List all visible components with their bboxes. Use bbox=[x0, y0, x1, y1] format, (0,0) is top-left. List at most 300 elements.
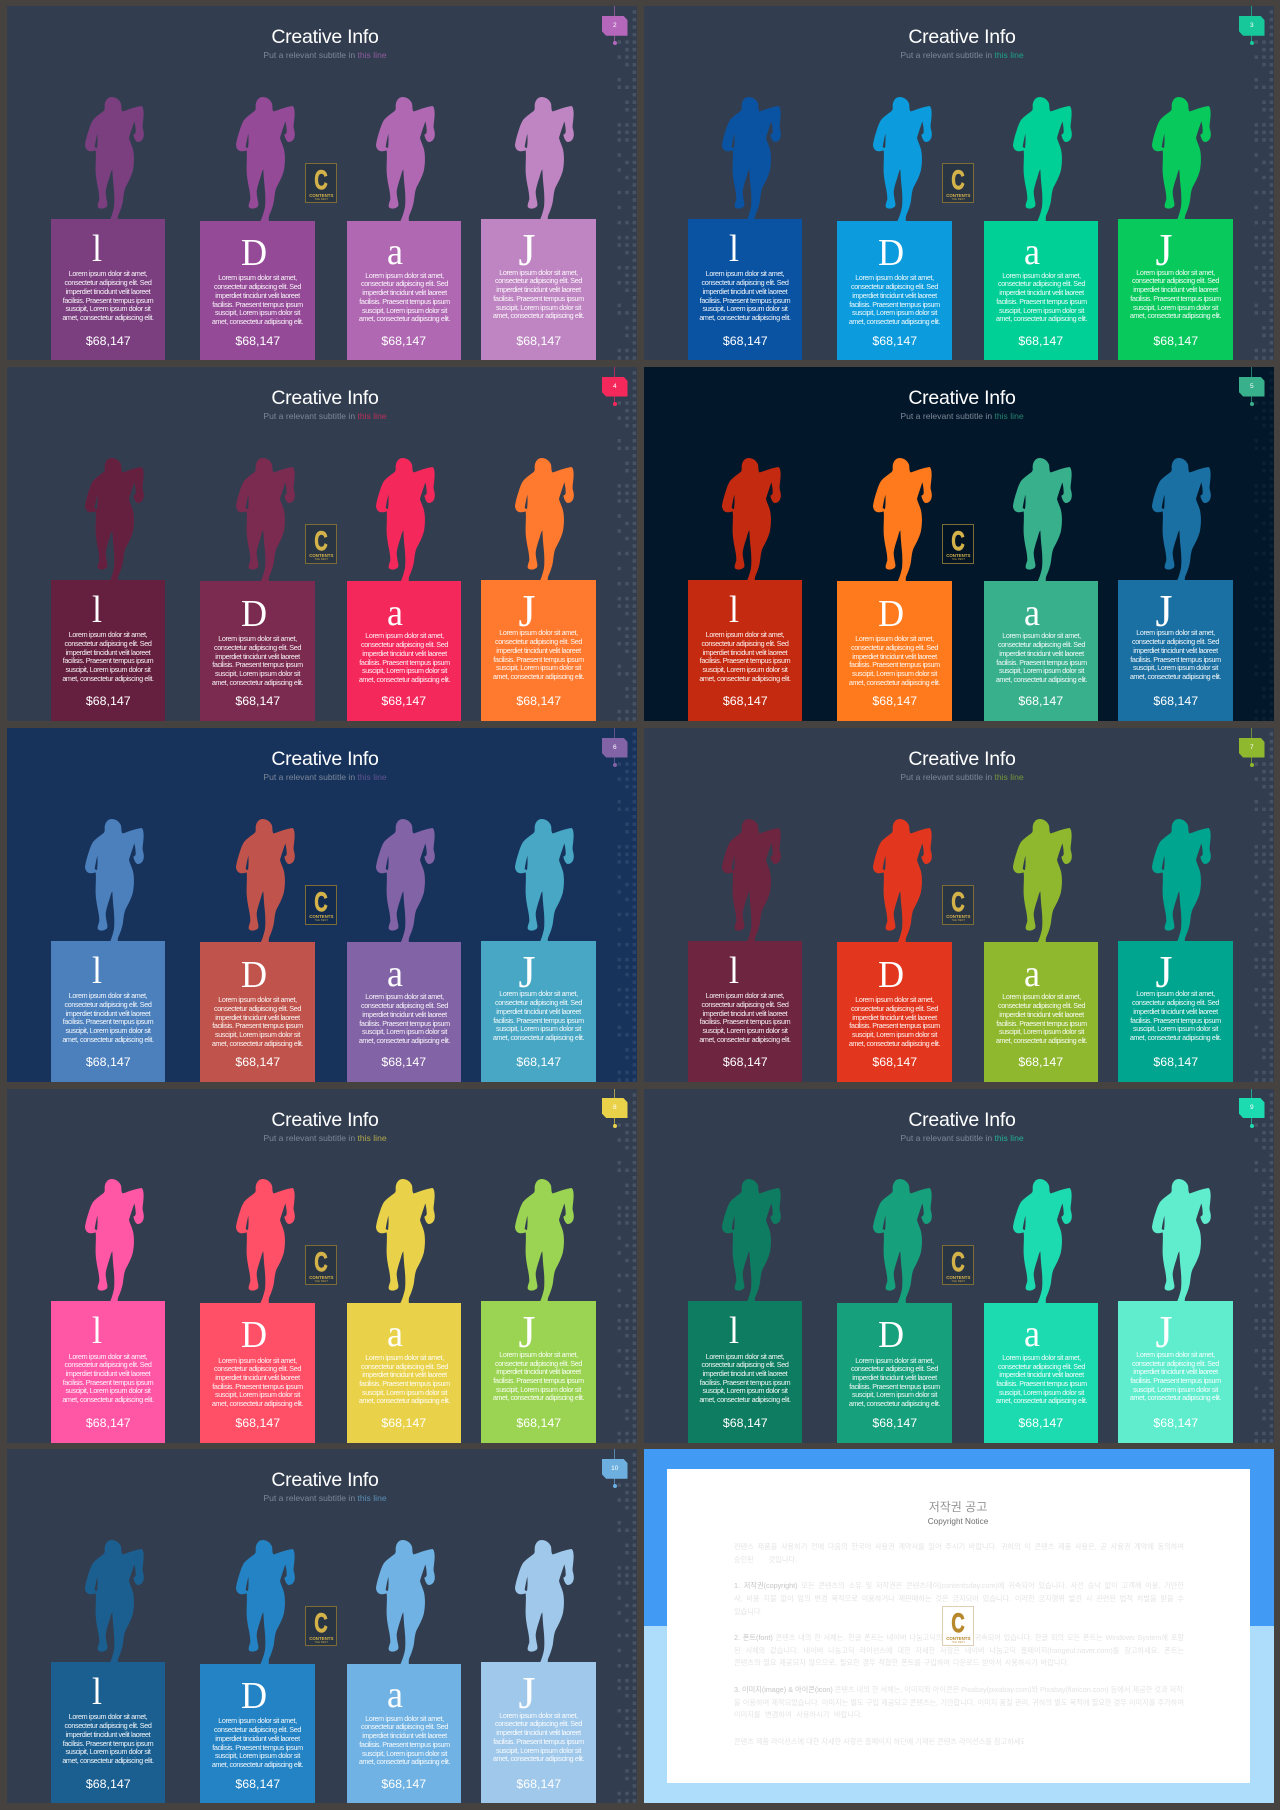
column 1: amet, consectetur adipiscing elit. bbox=[62, 674, 154, 683]
column 3: suscipit, Lorem ipsum dolor sit bbox=[999, 1388, 1084, 1397]
logo bbox=[305, 1245, 337, 1285]
column 4: facilisis. Praesent tempus ipsum bbox=[1130, 1376, 1221, 1385]
column 2: imperdiet tincidunt velit laoreet bbox=[852, 652, 937, 661]
logo: C bbox=[952, 1247, 965, 1277]
title: Creative Info bbox=[908, 387, 1016, 409]
column 3: consectetur adipiscing elit. Sed bbox=[361, 1362, 448, 1371]
logo: CONTENTS bbox=[946, 553, 970, 558]
column 1: imperdiet tincidunt velit laoreet bbox=[66, 1009, 150, 1018]
column 4: consectetur adipiscing elit. Sed bbox=[495, 998, 582, 1007]
column 3: consectetur adipiscing elit. Sed bbox=[998, 1001, 1085, 1010]
title: Creative Info bbox=[908, 748, 1016, 770]
column 3: a bbox=[387, 1313, 403, 1355]
column 3: suscipit, Lorem ipsum dolor sit bbox=[999, 666, 1084, 675]
column 1: amet, consectetur adipiscing elit. bbox=[62, 1756, 154, 1765]
logo bbox=[942, 524, 974, 564]
column 2: Lorem ipsum dolor sit amet, bbox=[218, 995, 297, 1004]
column 1: l bbox=[729, 228, 739, 270]
logo: THE BEST bbox=[314, 1640, 328, 1644]
subtitle: Put a relevant subtitle in this line bbox=[900, 1132, 1024, 1142]
column 3: Lorem ipsum dolor sit amet, bbox=[365, 1353, 444, 1362]
column 2: $68,147 bbox=[872, 334, 917, 348]
column 2 bbox=[200, 97, 315, 360]
column 4: suscipit, Lorem ipsum dolor sit bbox=[1133, 1024, 1218, 1033]
column 2: imperdiet tincidunt velit laoreet bbox=[215, 1013, 300, 1022]
column 2 bbox=[200, 458, 315, 721]
column 1: consectetur adipiscing elit. Sed bbox=[702, 278, 788, 287]
column 1: Lorem ipsum dolor sit amet, bbox=[706, 269, 784, 278]
column 3: a bbox=[1024, 1313, 1040, 1355]
column 2: imperdiet tincidunt velit laoreet bbox=[852, 291, 937, 300]
column 3: Lorem ipsum dolor sit amet, bbox=[1002, 631, 1081, 640]
column 3: imperdiet tincidunt velit laoreet bbox=[999, 288, 1084, 297]
subtitle: Put a relevant subtitle in this line bbox=[263, 772, 387, 782]
logo bbox=[942, 1245, 974, 1285]
column 1: amet, consectetur adipiscing elit. bbox=[62, 1395, 154, 1404]
column 4: consectetur adipiscing elit. Sed bbox=[495, 637, 582, 646]
subtitle: Put a relevant subtitle in this line bbox=[900, 50, 1024, 60]
column 2: $68,147 bbox=[235, 1055, 280, 1069]
title: Creative Info bbox=[271, 26, 379, 48]
column 4: imperdiet tincidunt velit laoreet bbox=[496, 646, 581, 655]
column 3: $68,147 bbox=[1018, 1416, 1063, 1430]
column 4: amet, consectetur adipiscing elit. bbox=[1130, 1393, 1221, 1402]
column 1: $68,147 bbox=[86, 1776, 131, 1790]
column 4: J bbox=[1155, 946, 1172, 997]
title: Creative Info bbox=[271, 387, 379, 409]
column 1: consectetur adipiscing elit. Sed bbox=[65, 1000, 151, 1009]
column 3: amet, consectetur adipiscing elit. bbox=[359, 1396, 450, 1405]
subtitle: Put a relevant subtitle in this line bbox=[263, 411, 387, 421]
column 1: facilisis. Praesent tempus ipsum bbox=[63, 656, 153, 665]
column 1: $68,147 bbox=[723, 1055, 768, 1069]
column 2 bbox=[837, 819, 952, 1082]
notice body: 이미지를 변경하여 사용하시기 바랍니다. bbox=[734, 1710, 862, 1719]
column 2 bbox=[200, 1179, 315, 1443]
column 2: Lorem ipsum dolor sit amet, bbox=[218, 634, 297, 643]
column 4: consectetur adipiscing elit. Sed bbox=[495, 1359, 582, 1368]
logo: C bbox=[315, 526, 328, 556]
column 1: Lorem ipsum dolor sit amet, bbox=[706, 1352, 784, 1361]
panel: slide 4 crimson orange bbox=[7, 367, 637, 721]
column 3: Lorem ipsum dolor sit amet, bbox=[365, 992, 444, 1001]
column 2: suscipit, Lorem ipsum dolor sit bbox=[852, 1030, 937, 1039]
column 2: Lorem ipsum dolor sit amet, bbox=[218, 1356, 297, 1365]
column 4: J bbox=[1155, 1306, 1172, 1357]
column 4: Lorem ipsum dolor sit amet, bbox=[1136, 1350, 1215, 1359]
column 4: suscipit, Lorem ipsum dolor sit bbox=[496, 302, 581, 312]
column 4: amet, consectetur adipiscing elit. bbox=[1130, 1033, 1221, 1042]
logo: CONTENTS bbox=[946, 192, 970, 198]
logo: CONTENTS bbox=[946, 1275, 970, 1280]
column 1: amet, consectetur adipiscing elit. bbox=[699, 1395, 791, 1404]
column 1 bbox=[688, 1179, 802, 1443]
column 4: amet, consectetur adipiscing elit. bbox=[1130, 311, 1221, 320]
logo: THE BEST bbox=[951, 196, 965, 200]
column 2: D bbox=[241, 232, 267, 274]
column 4: facilisis. Praesent tempus ipsum bbox=[493, 1737, 584, 1746]
column 1: suscipit, Lorem ipsum dolor sit bbox=[66, 1747, 150, 1756]
column 2: amet, consectetur adipiscing elit. bbox=[212, 1399, 303, 1408]
column 2: facilisis. Praesent tempus ipsum bbox=[212, 660, 303, 669]
column 2: imperdiet tincidunt velit laoreet bbox=[215, 1373, 300, 1382]
column 3: amet, consectetur adipiscing elit. bbox=[996, 1036, 1087, 1045]
column 2: Lorem ipsum dolor sit amet, bbox=[218, 273, 297, 282]
column 1: Lorem ipsum dolor sit amet, bbox=[69, 269, 147, 278]
column 1: Lorem ipsum dolor sit amet, bbox=[69, 991, 147, 1000]
logo bbox=[305, 524, 337, 564]
column 2: facilisis. Praesent tempus ipsum bbox=[212, 300, 303, 308]
column 4: facilisis. Praesent tempus ipsum bbox=[493, 655, 584, 664]
column 1: consectetur adipiscing elit. Sed bbox=[65, 1360, 151, 1369]
logo: C bbox=[315, 165, 328, 195]
column 2: amet, consectetur adipiscing elit. bbox=[212, 678, 303, 687]
column 3: suscipit, Lorem ipsum dolor sit bbox=[362, 666, 447, 675]
logo: THE BEST bbox=[314, 918, 328, 922]
title: Creative Info bbox=[908, 1108, 1016, 1130]
column 4 bbox=[1118, 1179, 1233, 1443]
column 4: J bbox=[518, 946, 535, 997]
column 3: a bbox=[387, 953, 403, 995]
page tag: 3 bbox=[1250, 22, 1254, 29]
panel: slide 2 purple bbox=[7, 6, 637, 360]
column 4: $68,147 bbox=[516, 1055, 561, 1069]
panel: slide 8 pink yellow bbox=[7, 1088, 637, 1442]
column 2: facilisis. Praesent tempus ipsum bbox=[849, 660, 940, 669]
subtitle: Put a relevant subtitle in this line bbox=[263, 50, 387, 60]
logo: CONTENTS bbox=[309, 553, 333, 558]
column 3: amet, consectetur adipiscing elit. bbox=[359, 1036, 450, 1045]
column 3: a bbox=[1024, 592, 1040, 634]
logo: CONTENTS bbox=[309, 1636, 333, 1640]
column 1: facilisis. Praesent tempus ipsum bbox=[700, 656, 790, 665]
column 2: Lorem ipsum dolor sit amet, bbox=[855, 995, 934, 1004]
column 3: facilisis. Praesent tempus ipsum bbox=[359, 658, 450, 667]
column 3: Lorem ipsum dolor sit amet, bbox=[365, 271, 444, 280]
column 3 bbox=[347, 458, 461, 721]
page tag: 5 bbox=[1250, 382, 1254, 390]
column 4: J bbox=[518, 585, 535, 636]
column 1: l bbox=[92, 1310, 102, 1352]
column 4: consectetur adipiscing elit. Sed bbox=[1132, 276, 1219, 285]
column 2 bbox=[837, 458, 952, 721]
column 2 bbox=[837, 1179, 952, 1443]
logo: THE BEST bbox=[951, 918, 965, 922]
column 4: $68,147 bbox=[1153, 1416, 1198, 1430]
column 4: facilisis. Praesent tempus ipsum bbox=[1130, 655, 1221, 664]
column 4: Lorem ipsum dolor sit amet, bbox=[499, 628, 578, 637]
column 2: consectetur adipiscing elit. Sed bbox=[214, 1004, 301, 1013]
column 4: suscipit, Lorem ipsum dolor sit bbox=[496, 1385, 581, 1394]
column 1: $68,147 bbox=[723, 1416, 768, 1430]
column 4: imperdiet tincidunt velit laoreet bbox=[1133, 1007, 1218, 1016]
column 1: $68,147 bbox=[86, 334, 131, 348]
column 4: $68,147 bbox=[1153, 1055, 1198, 1069]
column 1 bbox=[688, 97, 802, 360]
notice body: 된 서체와 같습니다. 네이버 나눔고딕 라이선스에 대한 자세한 사항은 네이버 나눔고딕 홈페이지(hangeul.naver.com)를 참고하세요. 폰트는 bbox=[734, 1646, 1184, 1655]
notice body: 콘텐츠 제품 라이선스에 대한 자세한 사항은 홈페이지 하단에 기재된 콘텐츠 라이선스를 참고하세요. bbox=[734, 1737, 1024, 1746]
column 3 bbox=[984, 1179, 1098, 1443]
column 4: imperdiet tincidunt velit laoreet bbox=[496, 1367, 581, 1376]
column 4: $68,147 bbox=[516, 694, 561, 708]
column 2: Lorem ipsum dolor sit amet, bbox=[855, 273, 934, 282]
column 2: suscipit, Lorem ipsum dolor sit bbox=[852, 669, 937, 678]
column 1: imperdiet tincidunt velit laoreet bbox=[66, 287, 150, 296]
column 3: amet, consectetur adipiscing elit. bbox=[359, 1757, 450, 1766]
column 2: facilisis. Praesent tempus ipsum bbox=[849, 300, 940, 308]
column 1: $68,147 bbox=[86, 1416, 131, 1430]
notice body: 을 이용하여 제작되었습니다. 이미지는 별도 구입 제공되고 콘텐츠는, 기만합니다. 이미지 품질 관리, 귀하의 별도 목적에 필요한 경우 이미지를 추가하여 bbox=[734, 1698, 1184, 1707]
column 4: Lorem ipsum dolor sit amet, bbox=[499, 1711, 578, 1720]
white sheet bbox=[666, 1469, 1250, 1783]
column 4: amet, consectetur adipiscing elit. bbox=[493, 1393, 584, 1402]
title: Creative Info bbox=[271, 1108, 379, 1130]
column 3: $68,147 bbox=[1018, 334, 1063, 348]
column 4: consectetur adipiscing elit. Sed bbox=[1132, 998, 1219, 1007]
logo bbox=[942, 163, 974, 203]
column 4: Lorem ipsum dolor sit amet, bbox=[1136, 989, 1215, 998]
column 1: suscipit, Lorem ipsum dolor sit bbox=[66, 304, 150, 313]
column 4: amet, consectetur adipiscing elit. bbox=[493, 672, 584, 681]
column 2: imperdiet tincidunt velit laoreet bbox=[215, 291, 300, 300]
column 3: amet, consectetur adipiscing elit. bbox=[359, 314, 450, 323]
column 4: suscipit, Lorem ipsum dolor sit bbox=[1133, 1385, 1218, 1394]
panel: slide 10 blues bbox=[7, 1449, 637, 1803]
logo: CONTENTS bbox=[309, 914, 333, 919]
column 1: amet, consectetur adipiscing elit. bbox=[699, 1035, 791, 1044]
column 1: imperdiet tincidunt velit laoreet bbox=[66, 648, 150, 657]
logo: C bbox=[315, 1608, 328, 1638]
column 4 bbox=[481, 1540, 596, 1803]
column 2: consectetur adipiscing elit. Sed bbox=[214, 1725, 301, 1734]
column 1: consectetur adipiscing elit. Sed bbox=[702, 1360, 788, 1369]
column 3 bbox=[984, 97, 1098, 360]
column 2: suscipit, Lorem ipsum dolor sit bbox=[215, 1030, 300, 1039]
column 2: D bbox=[241, 1675, 267, 1717]
column 3 bbox=[347, 97, 461, 360]
column 1: consectetur adipiscing elit. Sed bbox=[65, 1721, 151, 1730]
column 4: J bbox=[518, 1667, 535, 1718]
column 3: Lorem ipsum dolor sit amet, bbox=[1002, 271, 1081, 280]
column 3: suscipit, Lorem ipsum dolor sit bbox=[999, 1027, 1084, 1036]
column 4 bbox=[481, 1179, 596, 1443]
column 2 bbox=[837, 97, 952, 360]
column 4: Lorem ipsum dolor sit amet, bbox=[499, 989, 578, 998]
column 1 bbox=[688, 458, 802, 721]
column 1: Lorem ipsum dolor sit amet, bbox=[69, 1352, 147, 1361]
column 1: amet, consectetur adipiscing elit. bbox=[699, 674, 791, 683]
column 4: consectetur adipiscing elit. Sed bbox=[1132, 637, 1219, 646]
panel: slide 9 teal bbox=[644, 1088, 1274, 1442]
column 1: consectetur adipiscing elit. Sed bbox=[65, 639, 151, 648]
column 1: l bbox=[729, 1310, 739, 1352]
column 4: Lorem ipsum dolor sit amet, bbox=[1136, 628, 1215, 637]
column 1: $68,147 bbox=[723, 694, 768, 708]
column 1: amet, consectetur adipiscing elit. bbox=[62, 1035, 154, 1044]
column 3: suscipit, Lorem ipsum dolor sit bbox=[362, 1027, 447, 1036]
column 3: suscipit, Lorem ipsum dolor sit bbox=[999, 306, 1084, 314]
column 3: imperdiet tincidunt velit laoreet bbox=[362, 1370, 447, 1379]
column 2: D bbox=[878, 593, 904, 635]
column 3: consectetur adipiscing elit. Sed bbox=[361, 1722, 448, 1731]
column 4: suscipit, Lorem ipsum dolor sit bbox=[1133, 302, 1218, 312]
logo bbox=[305, 885, 337, 925]
column 4 bbox=[1118, 458, 1233, 721]
logo: THE BEST bbox=[314, 557, 328, 561]
column 2: suscipit, Lorem ipsum dolor sit bbox=[215, 1390, 300, 1399]
title: Creative Info bbox=[271, 1469, 379, 1491]
column 2: facilisis. Praesent tempus ipsum bbox=[849, 1021, 940, 1030]
column 3: $68,147 bbox=[1018, 694, 1063, 708]
column 2: imperdiet tincidunt velit laoreet bbox=[852, 1373, 937, 1382]
column 2: Lorem ipsum dolor sit amet, bbox=[855, 634, 934, 643]
panel: slide 7 red green bbox=[644, 728, 1274, 1082]
column 4: facilisis. Praesent tempus ipsum bbox=[493, 1376, 584, 1385]
column 4: J bbox=[518, 224, 535, 275]
column 4 bbox=[481, 819, 596, 1082]
column 2: amet, consectetur adipiscing elit. bbox=[849, 1039, 940, 1048]
column 4: $68,147 bbox=[1153, 694, 1198, 708]
notice body bbox=[644, 1449, 1274, 1803]
panel: slide 5 dark navy bbox=[644, 367, 1274, 721]
column 3: a bbox=[387, 1674, 403, 1716]
column 2: facilisis. Praesent tempus ipsum bbox=[212, 1021, 303, 1030]
column 2: imperdiet tincidunt velit laoreet bbox=[215, 1734, 300, 1743]
column 3: Lorem ipsum dolor sit amet, bbox=[1002, 992, 1081, 1001]
column 4: imperdiet tincidunt velit laoreet bbox=[1133, 1367, 1218, 1376]
logo: CONTENTS bbox=[309, 192, 333, 198]
column 3: facilisis. Praesent tempus ipsum bbox=[359, 1740, 450, 1749]
column 1: imperdiet tincidunt velit laoreet bbox=[703, 648, 787, 657]
column 4: Lorem ipsum dolor sit amet, bbox=[499, 1350, 578, 1359]
logo bbox=[305, 1606, 337, 1646]
page tag: 6 bbox=[613, 744, 617, 750]
column 4: amet, consectetur adipiscing elit. bbox=[493, 1033, 584, 1042]
column 1: consectetur adipiscing elit. Sed bbox=[65, 278, 151, 287]
column 3: Lorem ipsum dolor sit amet, bbox=[365, 631, 444, 640]
column 2: imperdiet tincidunt velit laoreet bbox=[215, 652, 300, 661]
column 2: consectetur adipiscing elit. Sed bbox=[851, 1004, 938, 1013]
notice body: 있습니다. bbox=[734, 1607, 762, 1616]
column 1: suscipit, Lorem ipsum dolor sit bbox=[66, 665, 150, 674]
column 4: facilisis. Praesent tempus ipsum bbox=[1130, 1016, 1221, 1025]
column 3: imperdiet tincidunt velit laoreet bbox=[999, 1370, 1084, 1379]
column 1: imperdiet tincidunt velit laoreet bbox=[66, 1730, 150, 1739]
column 2: amet, consectetur adipiscing elit. bbox=[212, 1039, 303, 1048]
logo: CONTENTS bbox=[309, 1275, 333, 1280]
column 1: l bbox=[92, 589, 102, 631]
notice body: 2. 폰트(font) 콘텐츠 내의 한 서체는, 한글 폰트는 네이버 나눔고딕의 저작권에 귀속되어 있습니다. 한글 외의 모든 폰트는 Windows System에 포함 bbox=[734, 1633, 1184, 1642]
column 3: amet, consectetur adipiscing elit. bbox=[996, 1396, 1087, 1405]
column 1: Lorem ipsum dolor sit amet, bbox=[69, 630, 147, 639]
column 2: amet, consectetur adipiscing elit. bbox=[849, 1399, 940, 1408]
column 3: imperdiet tincidunt velit laoreet bbox=[362, 1731, 447, 1740]
column 1 bbox=[51, 1540, 165, 1803]
column 1: Lorem ipsum dolor sit amet, bbox=[706, 991, 784, 1000]
column 3: a bbox=[1024, 231, 1040, 273]
logo bbox=[942, 1606, 974, 1646]
column 4: suscipit, Lorem ipsum dolor sit bbox=[496, 663, 581, 672]
column 3: suscipit, Lorem ipsum dolor sit bbox=[362, 306, 447, 314]
column 1: suscipit, Lorem ipsum dolor sit bbox=[66, 1026, 150, 1035]
column 4: consectetur adipiscing elit. Sed bbox=[495, 1719, 582, 1728]
column 4 bbox=[1118, 819, 1233, 1082]
column 4: facilisis. Praesent tempus ipsum bbox=[493, 1016, 584, 1025]
column 2: consectetur adipiscing elit. Sed bbox=[214, 282, 301, 291]
column 3: imperdiet tincidunt velit laoreet bbox=[999, 649, 1084, 658]
column 1: consectetur adipiscing elit. Sed bbox=[702, 639, 788, 648]
column 2: suscipit, Lorem ipsum dolor sit bbox=[852, 1390, 937, 1399]
column 1: facilisis. Praesent tempus ipsum bbox=[63, 1738, 153, 1748]
column 4: imperdiet tincidunt velit laoreet bbox=[496, 1007, 581, 1016]
column 3: $68,147 bbox=[381, 694, 426, 708]
column 3: a bbox=[1024, 953, 1040, 995]
column 4: $68,147 bbox=[516, 1416, 561, 1430]
column 3: Lorem ipsum dolor sit amet, bbox=[365, 1714, 444, 1723]
column 2 bbox=[200, 819, 315, 1082]
column 1: l bbox=[92, 228, 102, 270]
column 1: suscipit, Lorem ipsum dolor sit bbox=[703, 665, 787, 674]
notice body: 승인된 것입니다. bbox=[734, 1555, 797, 1564]
panel: copyright notice bbox=[644, 1449, 1274, 1803]
column 4: imperdiet tincidunt velit laoreet bbox=[1133, 646, 1218, 655]
logo bbox=[305, 163, 337, 203]
page tag: 2 bbox=[613, 22, 617, 29]
column 4: Lorem ipsum dolor sit amet, bbox=[1136, 268, 1215, 277]
column 1: facilisis. Praesent tempus ipsum bbox=[63, 1378, 153, 1387]
notice subtitle: Copyright Notice bbox=[928, 1517, 988, 1526]
column 3: imperdiet tincidunt velit laoreet bbox=[362, 1010, 447, 1019]
logo: CONTENTS bbox=[946, 1636, 970, 1640]
notice title: 저작권 공고 bbox=[929, 1500, 987, 1514]
column 2: amet, consectetur adipiscing elit. bbox=[849, 678, 940, 687]
column 1: facilisis. Praesent tempus ipsum bbox=[700, 1017, 790, 1026]
column 3: $68,147 bbox=[381, 1416, 426, 1430]
column 4: $68,147 bbox=[1153, 334, 1198, 348]
column 2: Lorem ipsum dolor sit amet, bbox=[218, 1716, 297, 1725]
logo: THE BEST bbox=[951, 557, 965, 561]
column 3: amet, consectetur adipiscing elit. bbox=[359, 675, 450, 684]
column 1: Lorem ipsum dolor sit amet, bbox=[706, 630, 784, 639]
column 3: facilisis. Praesent tempus ipsum bbox=[996, 658, 1087, 667]
page tag: 10 bbox=[611, 1465, 618, 1472]
column 2: suscipit, Lorem ipsum dolor sit bbox=[215, 308, 300, 317]
column 2: $68,147 bbox=[872, 1416, 917, 1430]
subtitle: Put a relevant subtitle in this line bbox=[263, 1132, 387, 1142]
column 1: facilisis. Praesent tempus ipsum bbox=[63, 296, 153, 304]
page tag: 8 bbox=[613, 1104, 617, 1111]
column 4: Lorem ipsum dolor sit amet, bbox=[499, 268, 578, 277]
logo: THE BEST bbox=[951, 1640, 965, 1644]
logo: CONTENTS bbox=[946, 914, 970, 919]
column 3: suscipit, Lorem ipsum dolor sit bbox=[362, 1388, 447, 1397]
column 2: $68,147 bbox=[235, 1416, 280, 1430]
logo: THE BEST bbox=[314, 1279, 328, 1283]
column 2: consectetur adipiscing elit. Sed bbox=[851, 282, 938, 291]
column 1: facilisis. Praesent tempus ipsum bbox=[63, 1017, 153, 1026]
column 2: $68,147 bbox=[235, 694, 280, 708]
column 4: J bbox=[1155, 585, 1172, 636]
notice body: 사, 비용 지불 없이 임의 변경 목적으로 이용하거나 재판매하는 것은 금지되어 있습니다. 이러한 금지행위 발견 시 관련된 법적 처벌을 받을 수 bbox=[734, 1594, 1184, 1603]
column 3: amet, consectetur adipiscing elit. bbox=[996, 314, 1087, 323]
column 3: facilisis. Praesent tempus ipsum bbox=[996, 1379, 1087, 1388]
column 4 bbox=[481, 97, 596, 360]
logo: THE BEST bbox=[951, 1279, 965, 1283]
column 3: consectetur adipiscing elit. Sed bbox=[998, 640, 1085, 649]
column 4: amet, consectetur adipiscing elit. bbox=[1130, 672, 1221, 681]
title: Creative Info bbox=[908, 26, 1016, 48]
column 4: suscipit, Lorem ipsum dolor sit bbox=[496, 1746, 581, 1754]
